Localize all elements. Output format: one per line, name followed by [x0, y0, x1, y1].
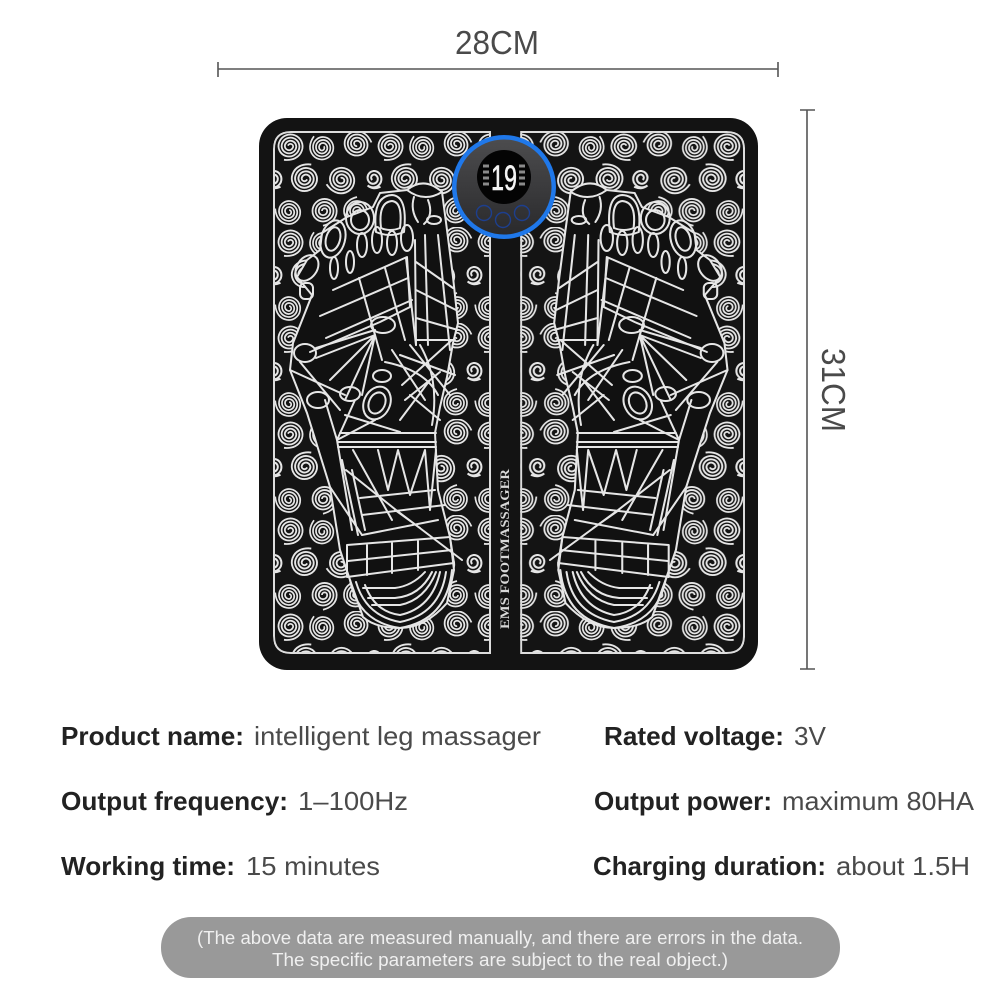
spec: rated voltage: Rated voltage: [604, 721, 784, 751]
spec: working time: 15 minutes [246, 851, 380, 881]
spec: output power: maximum 80HA [782, 786, 975, 816]
disclaimer note: (The above data are measured manually, and there are errors in the data. [197, 928, 803, 948]
left foot panel [273, 131, 491, 654]
spec: product name: intelligent leg massager [254, 721, 541, 751]
dimension: height 31CM [800, 110, 852, 669]
dimension: height 31CM: 31CM [815, 348, 852, 432]
LED screen: 19 [491, 159, 517, 198]
spec: rated voltage: 3V [794, 721, 827, 751]
spec: charging duration [593, 851, 970, 881]
product: massage mat [259, 118, 758, 670]
spec: product name [61, 721, 541, 751]
spec: output frequency: 1–100Hz [298, 786, 408, 816]
spec: charging duration: about 1.5H [836, 851, 970, 881]
dimension: width 28CM [218, 24, 778, 77]
spec: working time: Working time: [61, 851, 235, 881]
mat body [259, 118, 758, 670]
spec: output frequency [61, 786, 408, 816]
spec: product name: Product name: [61, 721, 244, 751]
dial buttons [476, 206, 530, 228]
control dial [452, 135, 556, 239]
spec: charging duration: Charging duration: [593, 851, 826, 881]
spec: output power: Output power: [594, 786, 772, 816]
spec: working time [61, 851, 380, 881]
disclaimer note [161, 917, 840, 978]
right foot panel (mirrored) [520, 131, 745, 654]
spec: output power [594, 786, 975, 816]
spec: output frequency: Output frequency: [61, 786, 288, 816]
disclaimer note: The specific parameters are subject to the real object.) [272, 950, 728, 970]
dimension: width 28CM: 28CM [455, 24, 539, 61]
product label: EMS FOOTMASSAGER [498, 468, 512, 629]
